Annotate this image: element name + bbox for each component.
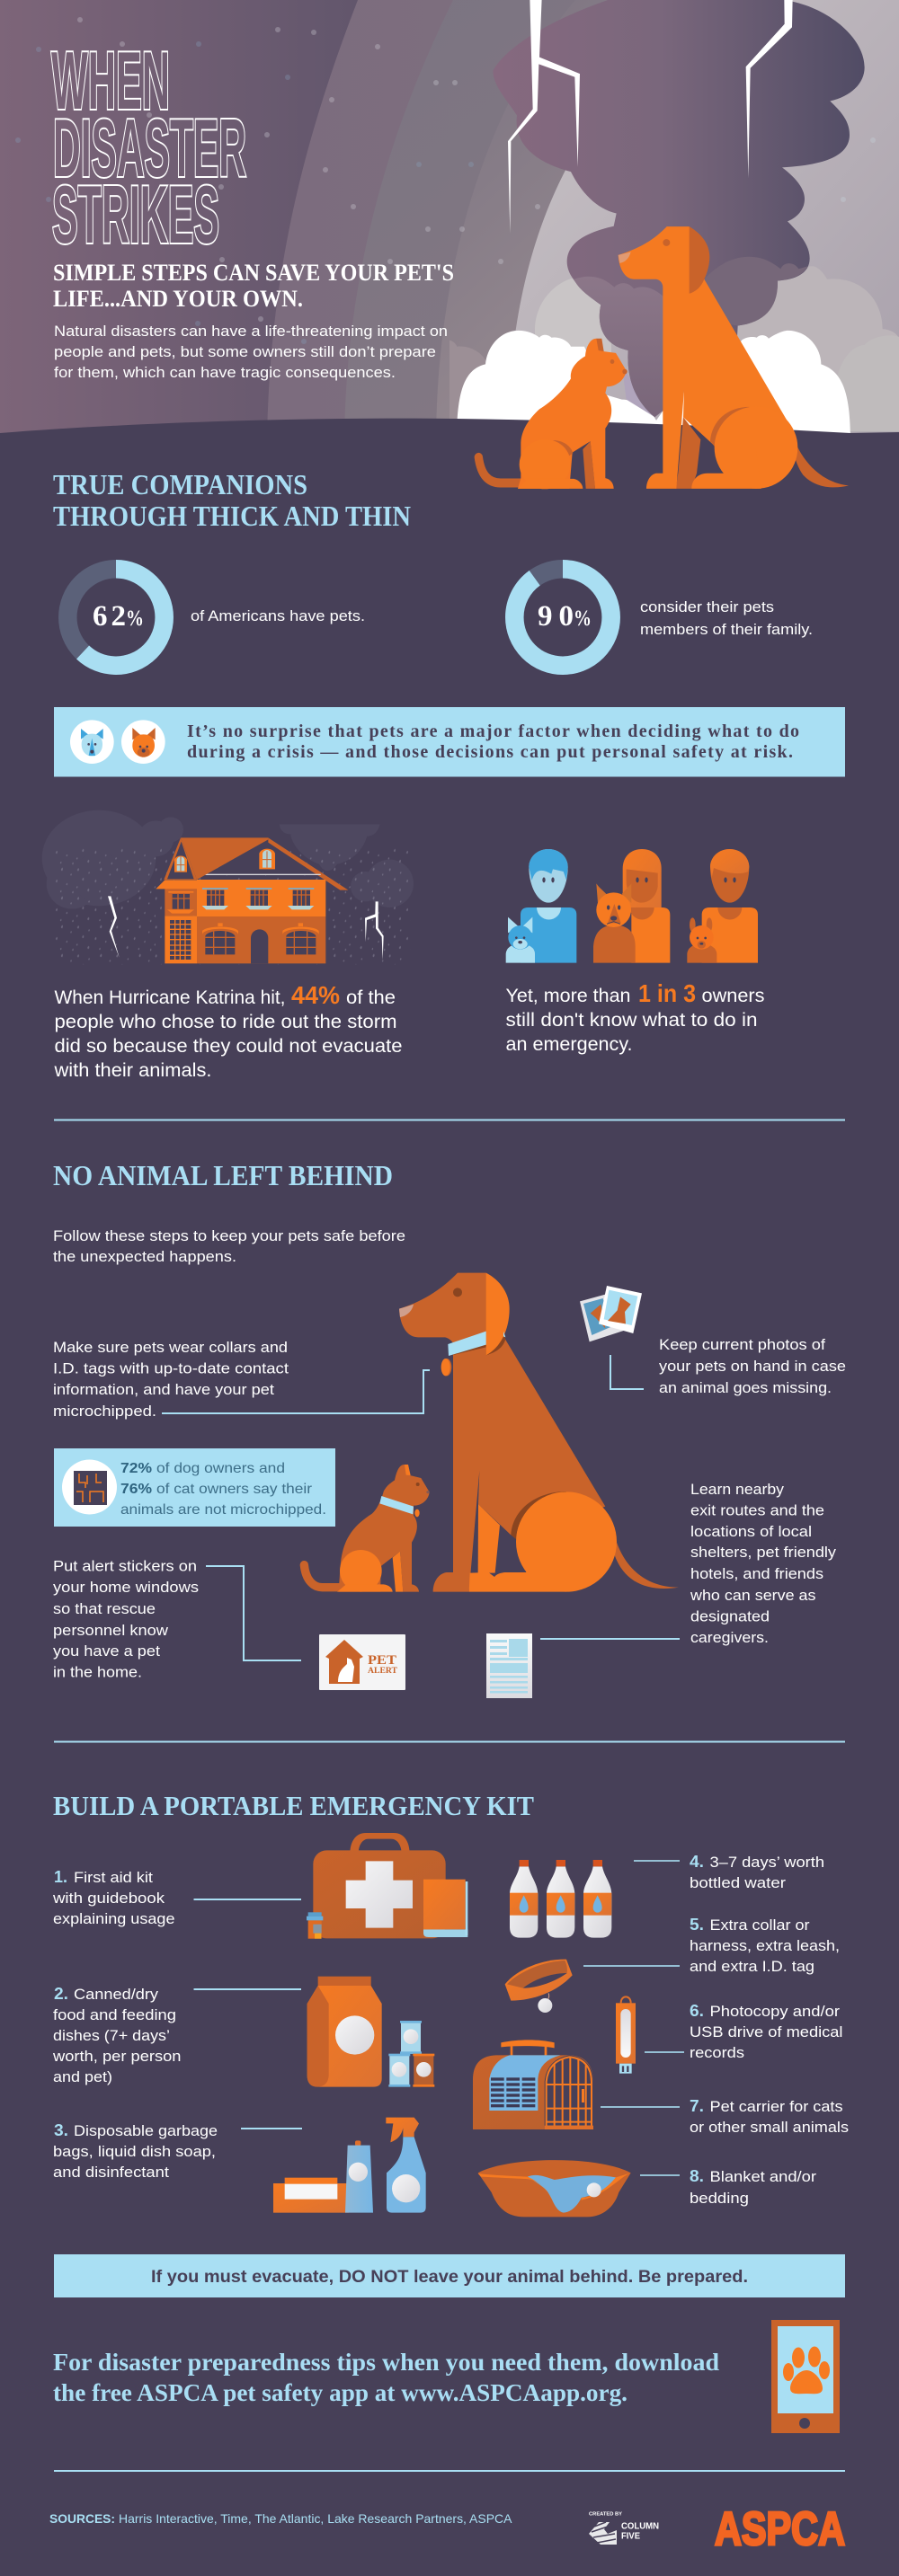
callout text: exit routes: locations of local xyxy=(690,1523,812,1540)
item 3 text: bags, liquid dish soap, xyxy=(53,2143,216,2160)
item 5 text: Extra collar or xyxy=(710,1917,810,1934)
callout text: photos: your pets on hand in case xyxy=(659,1358,846,1375)
illustration: hero cat and dog xyxy=(478,226,849,489)
ground and page dark fill xyxy=(0,419,899,557)
item 5 text: and extra I.D. tag xyxy=(690,1958,814,1975)
hero title: STRIKES xyxy=(52,170,219,261)
sources: Harris Interactive, Time, The Atlantic, Lake Research Partners, ASPCA xyxy=(119,2511,512,2526)
illustration: house in storm xyxy=(42,810,414,964)
item 2 text: worth, per person xyxy=(52,2048,181,2065)
item 3 text: Disposable garbage xyxy=(74,2122,218,2139)
lower arched windows xyxy=(205,931,316,954)
text: DISASTER xyxy=(53,103,246,194)
callout text: exit routes: Learn nearby xyxy=(690,1481,785,1498)
callout text: photos: an animal goes missing. xyxy=(659,1379,832,1396)
orange owner and dog xyxy=(593,849,670,963)
callout text: exit routes: shelters, pet friendly xyxy=(690,1544,837,1561)
icon: pet bed xyxy=(478,2160,631,2217)
upper windows xyxy=(173,890,310,909)
item 1 text: with guidebook xyxy=(52,1890,165,1907)
callout banner: personal safety xyxy=(54,707,845,776)
hero title: WHEN xyxy=(51,36,170,127)
callout text: exit routes: designated xyxy=(690,1608,770,1624)
heading: build a portable emergency kit: BUILD A PORTABLE EMERGENCY KIT xyxy=(53,1790,534,1821)
callout text: alert stickers: you have a pet xyxy=(53,1642,160,1660)
callout text: collars and tags: Make sure pets wear collars and xyxy=(53,1339,288,1356)
item 7 text: Pet carrier for cats xyxy=(710,2098,843,2115)
hero title xyxy=(51,36,246,261)
item 3 text: 3. xyxy=(54,2121,68,2139)
item 7 text: 7. xyxy=(690,2097,704,2115)
callout text: alert stickers: Put alert stickers on xyxy=(53,1558,197,1574)
text: 1 in 3 owners: Yet, more than xyxy=(505,986,631,1006)
callout text: alert stickers: in the home. xyxy=(53,1664,142,1680)
text: follow these steps: the unexpected happens. xyxy=(53,1248,236,1265)
lightning left xyxy=(108,896,120,958)
text: hurricane katrina stat: did so because they could not evacuate xyxy=(54,1036,403,1057)
donut chart: 90% xyxy=(514,569,611,666)
item 8 text: 8. xyxy=(690,2167,704,2185)
text: 1 in 3 owners: 1 in 3 xyxy=(638,979,696,1007)
storm ring one xyxy=(267,0,899,440)
icon: orange dog xyxy=(121,720,165,764)
stat text: 62%: of Americans have pets. xyxy=(191,607,365,624)
rain xyxy=(54,847,411,964)
lightning right xyxy=(365,901,384,960)
far light clouds xyxy=(450,266,899,431)
lower right cloud lobe xyxy=(704,257,807,325)
app download text: the free ASPCA pet safety app at www.ASPCAapp.org. xyxy=(53,2379,628,2406)
callout text: alert stickers xyxy=(53,1558,199,1680)
stat text: 90% xyxy=(640,598,813,638)
banner text: during a crisis — and those decisions can put personal safety at risk. xyxy=(187,742,793,762)
sky base xyxy=(0,0,899,440)
item 5 text: 5. xyxy=(690,1916,704,1934)
illustration: dog and cat with collars xyxy=(304,1273,679,1592)
item 3 text xyxy=(53,2121,218,2181)
small cat xyxy=(304,1465,430,1592)
item 1 text: explaining usage xyxy=(53,1910,174,1927)
large dog xyxy=(399,1273,679,1592)
kit connectors right xyxy=(583,1860,684,2176)
text: 1 in 3 owners xyxy=(505,979,764,1055)
item 3 text: and disinfectant xyxy=(53,2164,169,2181)
hero subtitle xyxy=(53,260,454,312)
callout text: alert stickers: personnel know xyxy=(53,1622,169,1639)
text: hurricane katrina stat: with their animals. xyxy=(53,1060,211,1081)
storm ring two xyxy=(344,0,899,440)
microchip stat text: of dog owners and xyxy=(156,1461,285,1476)
kit illustrations xyxy=(273,1833,636,2217)
callout text: collars and tags: information, and have your pet xyxy=(53,1381,274,1398)
connector: alert stickers xyxy=(206,1566,301,1660)
item 6 text: records xyxy=(690,2044,744,2061)
callout text: exit routes: hotels, and friends xyxy=(690,1565,823,1582)
item 5 text: harness, extra leash, xyxy=(690,1937,840,1954)
icon: blue dog xyxy=(70,720,114,764)
item 2 text xyxy=(52,1985,181,2085)
item 6 text: USB drive of medical xyxy=(690,2023,843,2040)
sliver behind cloud tail xyxy=(622,364,654,417)
lower left cloud lobe xyxy=(574,277,665,417)
icon: water bottles xyxy=(510,1860,611,1938)
callout banner: do not leave your animal xyxy=(54,2254,845,2297)
item 7 text xyxy=(690,2097,849,2136)
panel: hero storm sky xyxy=(0,0,899,449)
main storm cloud xyxy=(493,0,865,417)
item 8 text: bedding xyxy=(690,2190,749,2207)
hero subtitle: SIMPLE STEPS CAN SAVE YOUR PET'S xyxy=(53,260,454,286)
connector: photos xyxy=(610,1355,644,1389)
banner text: It’s no surprise that pets are a major factor when deciding what to do xyxy=(187,721,799,741)
text: follow these steps: Follow these steps to keep your pets safe before xyxy=(53,1227,405,1244)
icon: cleaning supplies xyxy=(273,2118,426,2213)
callout text: collars and tags: I.D. tags with up-to-date contact xyxy=(53,1360,289,1377)
callout text: alert stickers: your home windows xyxy=(53,1579,199,1596)
donut chart: 90%: 90 xyxy=(538,600,574,633)
donut chart: 62%: % xyxy=(126,606,144,631)
hero intro text: Natural disasters can have a life-threatening impact on xyxy=(54,323,448,340)
text: hurricane katrina stat: 44% xyxy=(291,981,340,1009)
item 1 text: First aid kit xyxy=(74,1869,153,1886)
callout text: collars and tags: microchipped. xyxy=(53,1403,156,1420)
item 1 text: 1. xyxy=(54,1868,67,1886)
storm ring four xyxy=(508,0,899,440)
connector: collars to tag xyxy=(162,1370,430,1413)
snow dots xyxy=(15,17,876,344)
callout text: exit routes xyxy=(690,1481,837,1646)
item 2 text: 2. xyxy=(54,1985,68,2003)
heading: true companions: TRUE COMPANIONS xyxy=(53,468,307,500)
text: hurricane katrina stat xyxy=(53,981,403,1081)
text: hurricane katrina stat: of the xyxy=(346,987,396,1008)
microchip stat text xyxy=(120,1461,326,1518)
item 6 text: Photocopy and/or xyxy=(710,2003,840,2020)
icon: pet collar xyxy=(505,1960,573,2013)
lower grid window xyxy=(170,920,191,960)
item 2 text: food and feeding xyxy=(53,2006,176,2023)
text: follow these steps xyxy=(53,1227,405,1265)
icon: pet photos xyxy=(580,1286,642,1341)
item 4 text: 3–7 days’ worth xyxy=(710,1854,824,1871)
door xyxy=(251,929,268,963)
hero title: STRIKES xyxy=(52,170,219,261)
heading: true companions: THROUGH THICK AND THIN xyxy=(53,500,411,532)
text: hurricane katrina stat: people who chose to ride out the storm xyxy=(54,1012,396,1032)
item 1 text xyxy=(52,1868,174,1927)
illustration: owners with pets xyxy=(506,849,758,963)
kit connectors left xyxy=(194,1899,302,2129)
text: 1 in 3 owners: still don't know what to do in xyxy=(505,1010,757,1031)
icon: pet carrier xyxy=(473,2040,593,2129)
hero intro text: people and pets, but some owners still don’t prepare xyxy=(54,343,436,360)
kit list right xyxy=(690,1853,849,2207)
icon: food bag and cans xyxy=(307,1977,434,2087)
text: 1 in 3 owners: an emergency. xyxy=(505,1034,633,1055)
heading: true companions xyxy=(53,468,411,532)
item 4 text xyxy=(690,1853,824,1891)
donut chart: 62%: 62 xyxy=(93,600,126,633)
app download text xyxy=(53,2349,719,2406)
microchip stat text: animals are not microchipped. xyxy=(120,1502,326,1518)
logo: column five xyxy=(589,2512,659,2545)
hero dog xyxy=(619,226,849,489)
banner text xyxy=(187,721,799,762)
text: 1 in 3 owners: owners xyxy=(701,986,764,1006)
item 5 text xyxy=(690,1916,840,1975)
callout text: exit routes: who can serve as xyxy=(690,1587,816,1604)
connector: document xyxy=(540,1638,680,1640)
item 6 text: 6. xyxy=(690,2002,704,2020)
attic windows xyxy=(174,849,275,872)
blue owner and cat xyxy=(506,849,576,963)
donut chart: 90%: % xyxy=(574,606,592,631)
lightning bolt left xyxy=(508,0,580,234)
icon: usb drive xyxy=(616,1996,636,2074)
callout text: exit routes: exit routes and the xyxy=(690,1502,824,1518)
microchip stat text: of cat owners say their xyxy=(156,1482,313,1497)
icon: pet alert sticker: ALERT xyxy=(368,1666,397,1675)
icon: phone with paw xyxy=(771,2320,840,2433)
logo: aspca: ASPCA xyxy=(715,2503,845,2555)
heading: no animal left behind: NO ANIMAL LEFT BEHIND xyxy=(53,1159,393,1191)
item 6 text xyxy=(690,2002,843,2061)
house xyxy=(156,837,348,963)
app download text: For disaster preparedness tips when you need them, download xyxy=(53,2349,719,2376)
logo: column five: FIVE xyxy=(621,2532,640,2541)
icon: microchip xyxy=(62,1459,117,1515)
item 4 text: bottled water xyxy=(690,1874,786,1891)
hero subtitle: LIFE...AND YOUR OWN. xyxy=(53,286,303,312)
sources: SOURCES: xyxy=(49,2511,115,2526)
callout banner: do not leave your animal: If you must evacuate, DO NOT leave your animal behind. Be prepared. xyxy=(151,2268,748,2287)
item 2 text: dishes (7+ days’ xyxy=(53,2027,170,2044)
item 4 text: 4. xyxy=(690,1853,704,1871)
callout text: photos xyxy=(659,1336,846,1396)
storm clouds xyxy=(42,810,414,909)
white clouds xyxy=(457,331,850,449)
icon: pet alert sticker xyxy=(319,1634,405,1690)
hero title: WHEN xyxy=(51,36,170,127)
item 2 text: Canned/dry xyxy=(74,1986,159,2003)
callout banner: microchip stat xyxy=(54,1448,335,1527)
kit list left xyxy=(52,1868,218,2181)
item 7 text: or other small animals xyxy=(690,2119,849,2136)
item 8 text xyxy=(690,2167,816,2207)
text: DISASTER xyxy=(53,103,246,194)
orange owner and small dog xyxy=(687,849,758,963)
item 8 text: Blanket and/or xyxy=(710,2168,816,2185)
hero clouds and lightning xyxy=(450,0,899,449)
item 2 text: and pet) xyxy=(53,2068,112,2085)
callout text: collars and tags xyxy=(53,1339,289,1420)
hero intro text xyxy=(54,323,448,381)
callout text: alert stickers: so that rescue xyxy=(53,1600,156,1617)
icon: first aid kit xyxy=(307,1833,467,1939)
storm ring three xyxy=(436,0,899,440)
donut chart: 62% xyxy=(67,569,165,666)
icon: evacuation document xyxy=(486,1633,532,1698)
text: hurricane katrina stat: When Hurricane Katrina hit, xyxy=(54,987,286,1008)
stat text: 90%: members of their family. xyxy=(640,621,813,638)
lightning bolt right xyxy=(746,0,793,178)
microchip stat text: 76% xyxy=(120,1482,152,1497)
icon: pet alert sticker: PET xyxy=(368,1653,396,1668)
callout text: exit routes: caregivers. xyxy=(690,1629,769,1646)
logo: column five: CREATED BY xyxy=(589,2512,623,2518)
microchip stat text: 72% xyxy=(120,1461,152,1476)
hero cat xyxy=(478,339,628,489)
callout text: photos: Keep current photos of xyxy=(659,1336,825,1353)
stat text: 90%: consider their pets xyxy=(640,598,774,615)
hero intro text: for them, which can have tragic consequences. xyxy=(54,364,396,381)
logo: column five: COLUMN xyxy=(621,2521,659,2532)
